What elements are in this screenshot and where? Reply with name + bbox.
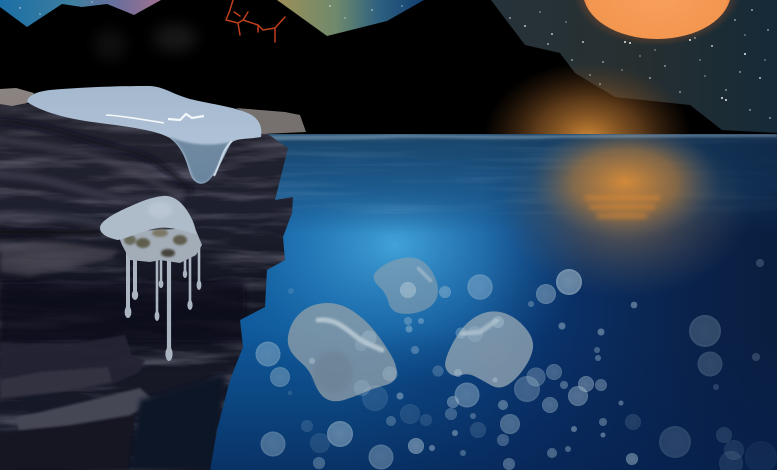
jellyfish blob: right xyxy=(445,311,533,388)
jellyfish blob: large left xyxy=(288,303,397,401)
sky patch: left blue and purple xyxy=(0,0,161,27)
rock texture xyxy=(0,95,300,470)
horizon glow on the mountains xyxy=(490,68,686,134)
upper water band xyxy=(268,134,777,228)
icon: red lightning crack xyxy=(226,0,285,42)
upper ice dome xyxy=(100,196,196,240)
ice drip interior xyxy=(170,137,230,183)
rock cap: top left xyxy=(0,88,34,106)
reflection stripes xyxy=(585,196,660,218)
sky patch: right starfield xyxy=(491,0,777,133)
rock band: dark middle xyxy=(0,282,245,342)
sky patch: centre olive and blue xyxy=(277,0,424,36)
water surface line xyxy=(262,134,777,141)
cliff: layered dark rock xyxy=(0,95,300,470)
rock ledge: lit slab xyxy=(0,241,118,276)
ocean xyxy=(200,105,777,470)
moon xyxy=(573,0,741,46)
rock column: lower right xyxy=(130,375,225,470)
deep water fade xyxy=(210,351,777,470)
mist over mountains xyxy=(94,24,197,61)
ripples xyxy=(269,134,731,214)
jellyfish blob: top xyxy=(373,257,438,314)
ice sheet on the cliff top xyxy=(27,86,261,184)
rock ledges: lower blocks xyxy=(0,335,155,470)
stars xyxy=(19,1,771,119)
background: black mountains xyxy=(0,0,777,140)
bubbles xyxy=(256,259,777,470)
dark right water xyxy=(517,134,777,427)
rock strata upper xyxy=(0,122,190,233)
underwater light glow xyxy=(266,189,559,356)
moon reflection: wide haze xyxy=(518,140,734,288)
moon reflection: core xyxy=(538,134,712,230)
ice mass with drips on the cliff face xyxy=(100,196,202,361)
ice highlight squiggle xyxy=(168,114,204,120)
ice highlight xyxy=(106,115,164,123)
drips xyxy=(125,245,201,361)
embedded stones xyxy=(124,229,187,257)
lower mass with embedded stones xyxy=(117,228,202,263)
rock cap: top right xyxy=(236,108,306,134)
